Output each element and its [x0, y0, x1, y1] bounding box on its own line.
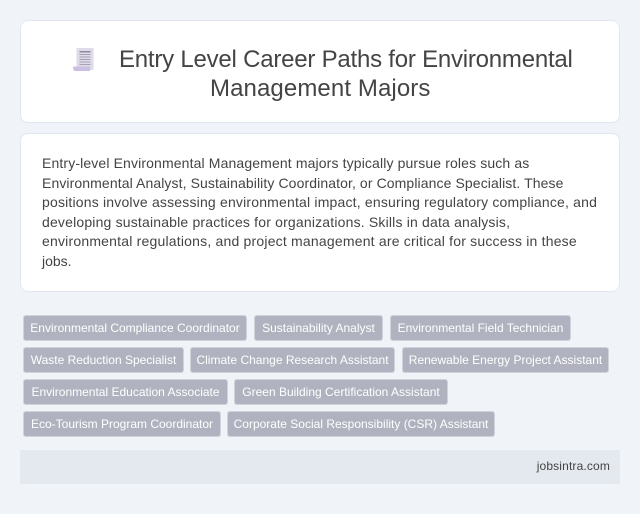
description text — [42, 155, 597, 269]
tag: Climate Change Research Assistant — [196, 353, 389, 367]
tag: Waste Reduction Specialist — [31, 353, 176, 367]
tag: Environmental Compliance Coordinator — [30, 321, 240, 335]
tag: Sustainability Analyst — [262, 321, 375, 335]
tag — [190, 347, 395, 373]
tag — [254, 315, 383, 341]
description text: jobs. — [42, 252, 72, 268]
description text: Entry-level Environmental Management majors typically pursue roles such as — [42, 155, 529, 171]
tag — [23, 315, 247, 341]
icon: document scroll — [73, 48, 94, 71]
tag — [23, 347, 184, 373]
tag: Environmental Education Associate — [31, 385, 220, 399]
title: Entry Level Career Paths for Environmental — [119, 46, 573, 72]
tag — [23, 411, 221, 437]
tag — [390, 315, 571, 341]
tag: Environmental Field Technician — [398, 321, 563, 335]
description text: environmental regulations, and project management are critical for success in these — [42, 233, 577, 249]
tag — [23, 379, 228, 405]
tag — [402, 347, 609, 373]
tag: Renewable Energy Project Assistant — [409, 353, 602, 367]
footer text: jobsintra.com — [537, 459, 610, 473]
panel: description card — [20, 133, 620, 292]
title — [119, 46, 573, 102]
tag — [234, 379, 448, 405]
description text: Environmental Analyst, Sustainability Coordinator, or Compliance Specialist. These — [42, 174, 564, 190]
description text: developing sustainable practices for organizations. Skills in data analysis, — [42, 214, 510, 230]
title: Management Majors — [210, 74, 430, 102]
tag: Green Building Certification Assistant — [242, 385, 440, 399]
description text: positions involve assessing environmental impact, ensuring regulatory compliance, and — [42, 194, 597, 210]
footer bar — [20, 450, 620, 484]
tag — [227, 411, 495, 437]
tag list — [23, 315, 609, 437]
panel: title card — [20, 20, 620, 123]
tag: Eco-Tourism Program Coordinator — [31, 417, 213, 431]
tag: Corporate Social Responsibility (CSR) Assistant — [234, 417, 488, 431]
